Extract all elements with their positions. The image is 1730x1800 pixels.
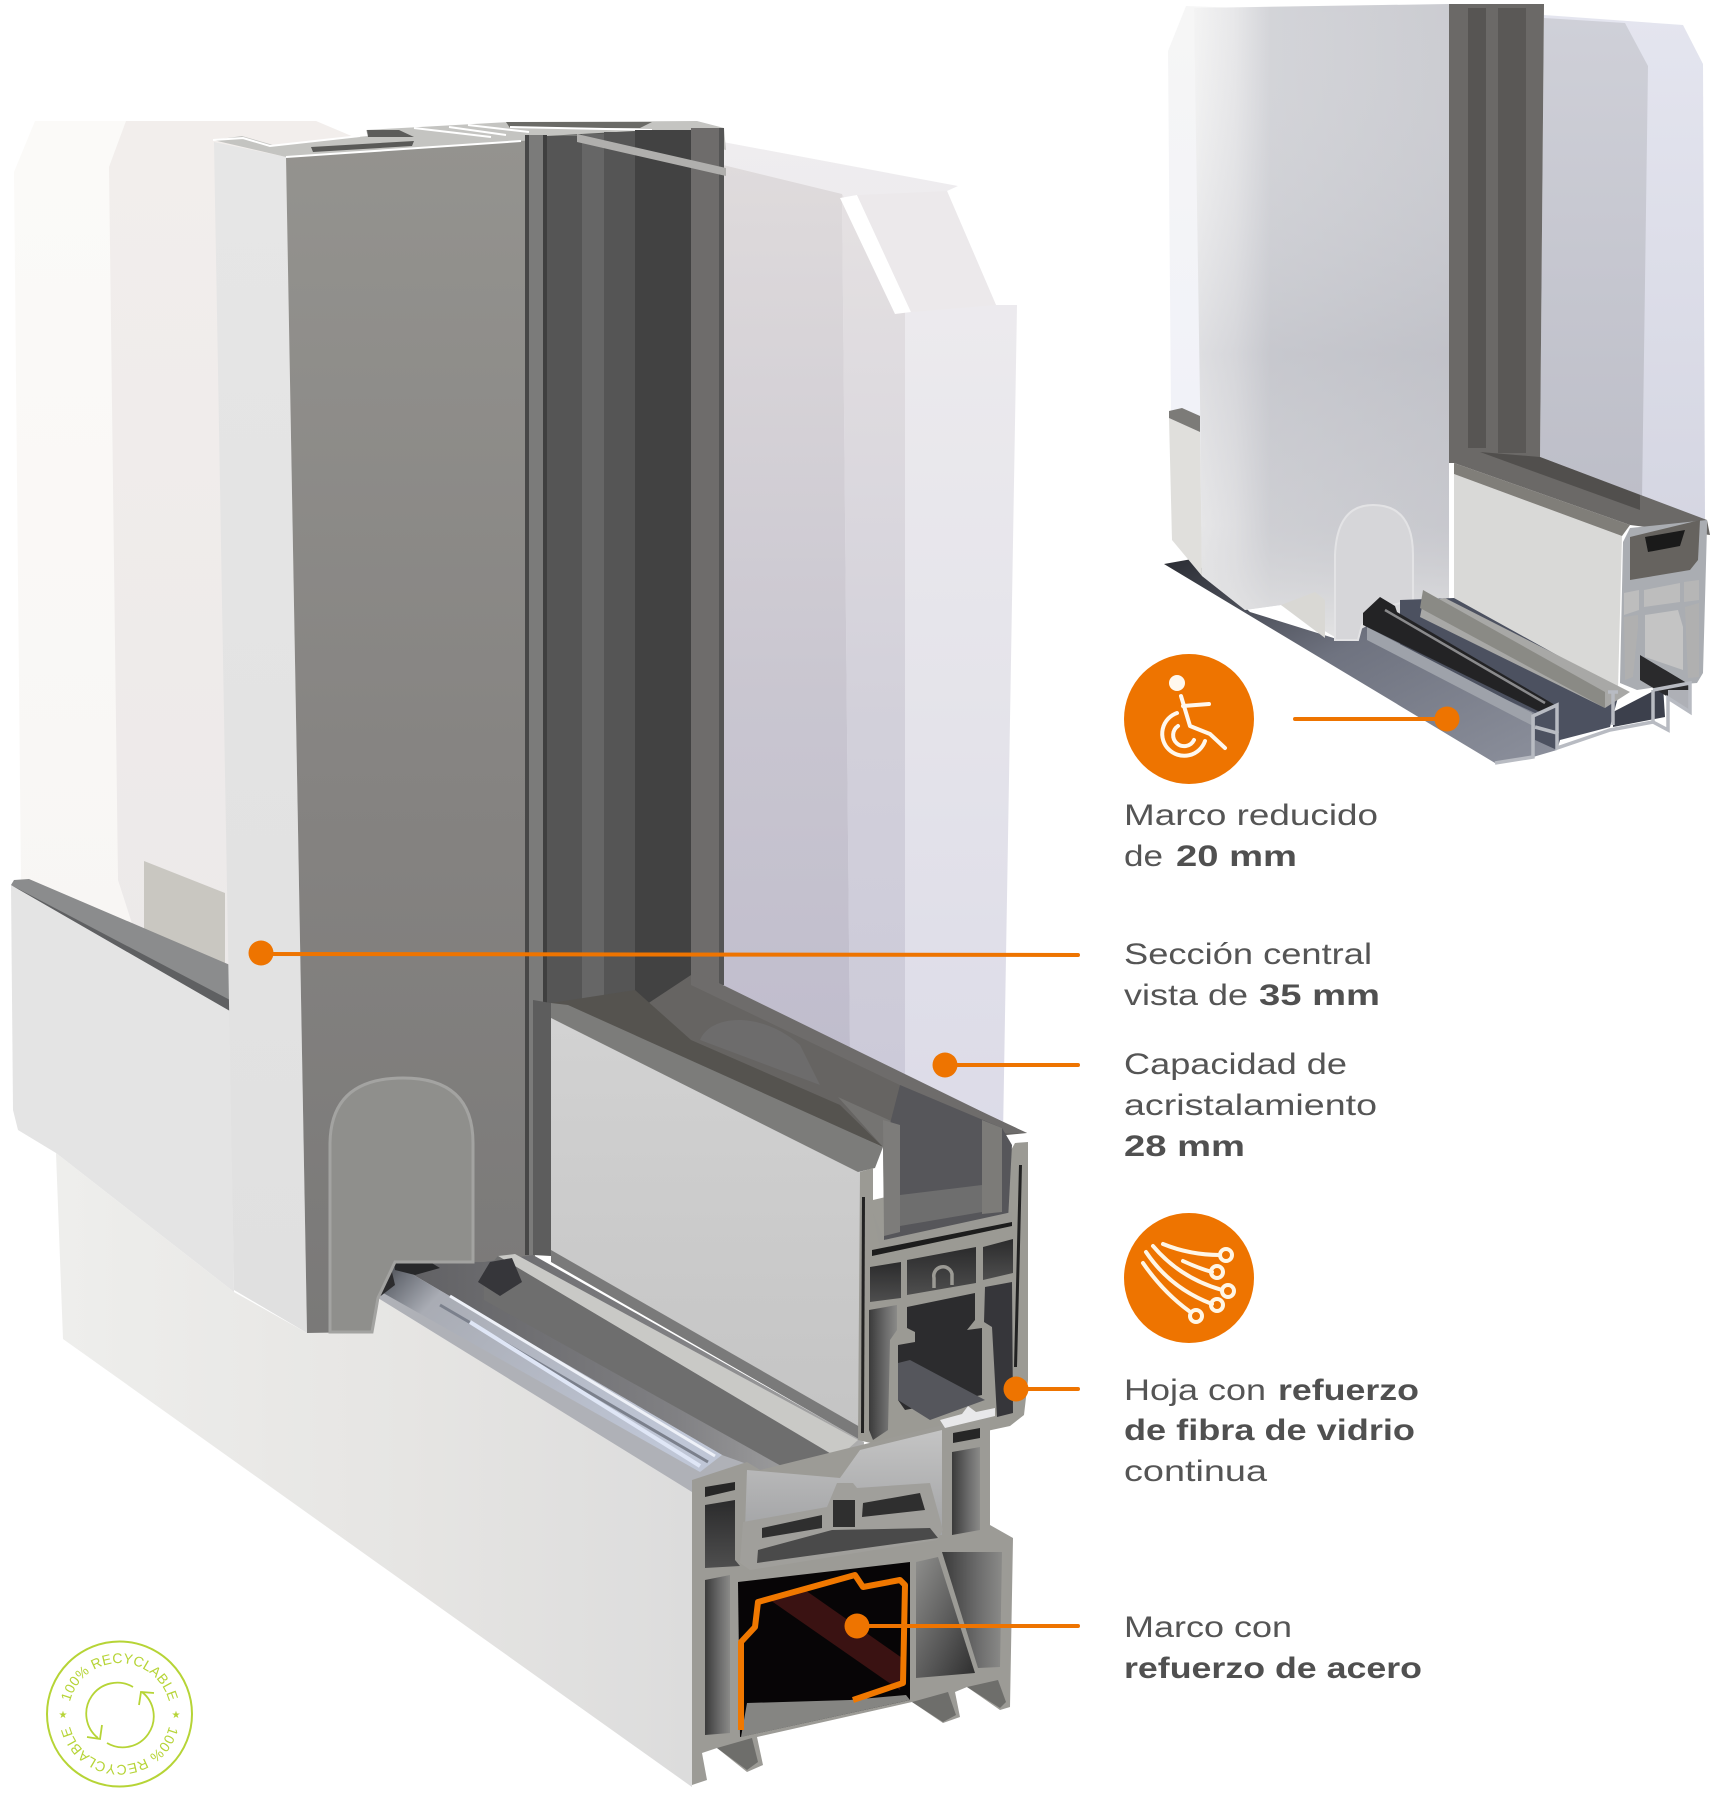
text: central section: vista de [1124, 979, 1248, 1012]
leader: wheelchair threshold [1295, 706, 1460, 732]
text: reduced frame [1124, 799, 1378, 873]
text: central section: Sección central [1124, 938, 1372, 971]
lower sill face [56, 1153, 692, 1787]
badge: 100% recyclable [46, 1640, 193, 1788]
text: central section: 35 mm [1259, 979, 1380, 1012]
text: steel reinforcement: refuerzo de acero [1124, 1652, 1422, 1685]
text: fibre reinforcement: continua [1124, 1455, 1267, 1488]
badge: 100% recyclable: ★ [59, 1710, 68, 1721]
text: steel reinforcement [1124, 1611, 1422, 1685]
text: glazing capacity [1124, 1048, 1377, 1163]
chrome rail [378, 1252, 747, 1499]
small: leaf panel [1454, 463, 1630, 689]
leaf panel [533, 1000, 883, 1440]
frame cross-section [692, 1406, 1013, 1785]
post: grey face [286, 140, 535, 1333]
badge: 100% recyclable: ★ [172, 1710, 181, 1721]
small: arch end cap [1335, 505, 1413, 640]
dark glazing column [525, 128, 1027, 1255]
small: right glass [1540, 15, 1705, 520]
floor between the rails [393, 1255, 864, 1484]
left frame stub [11, 861, 234, 1292]
text: central section [1124, 938, 1380, 1012]
small: leaf cross-section [1620, 520, 1707, 695]
leader: central section [248, 940, 1078, 966]
text: glazing capacity: Capacidad de [1124, 1048, 1347, 1081]
top cross-section of frame [213, 121, 726, 157]
text: glazing capacity: acristalamiento [1124, 1089, 1377, 1122]
arch end cap [330, 1078, 473, 1332]
large window section [11, 121, 1028, 1787]
small: dark glazing column [1449, 4, 1710, 535]
small window view [1164, 4, 1710, 763]
small: post [1194, 4, 1449, 640]
leader: glazing capacity [932, 1052, 1078, 1078]
track rail [478, 1254, 858, 1484]
small: rails [1363, 590, 1630, 750]
text: reduced frame: Marco reducido [1124, 799, 1378, 832]
left glass pane [14, 121, 368, 1000]
text: fibre reinforcement: de fibra de vidrio [1124, 1414, 1415, 1447]
icon: wheelchair [1124, 654, 1254, 784]
text: fibre reinforcement: Hoja con [1124, 1374, 1266, 1407]
text: fibre reinforcement [1124, 1374, 1419, 1488]
text: glazing capacity: 28 mm [1124, 1130, 1245, 1163]
badge: 100% recyclable: 100% RECYCLABLE [61, 1727, 178, 1775]
small: floor plate [1164, 559, 1557, 763]
post: white edge [214, 142, 307, 1333]
leader: fibre reinforcement [1004, 1376, 1078, 1402]
text: steel reinforcement: Marco con [1124, 1611, 1292, 1644]
text: reduced frame: de [1124, 840, 1163, 873]
text: fibre reinforcement: refuerzo [1278, 1374, 1419, 1407]
small: sill cross-section [1495, 660, 1690, 763]
leaf cross-section [858, 1085, 1028, 1450]
text: reduced frame: 20 mm [1176, 840, 1297, 873]
icon: glass fibre [1124, 1213, 1254, 1343]
right glass pane [723, 142, 1017, 1135]
small: left frame stub [1169, 408, 1202, 576]
small: left glass [1168, 6, 1240, 576]
badge: 100% recyclable: 100% RECYCLABLE [62, 1653, 178, 1701]
leader: steel reinforcement [844, 1614, 1078, 1638]
